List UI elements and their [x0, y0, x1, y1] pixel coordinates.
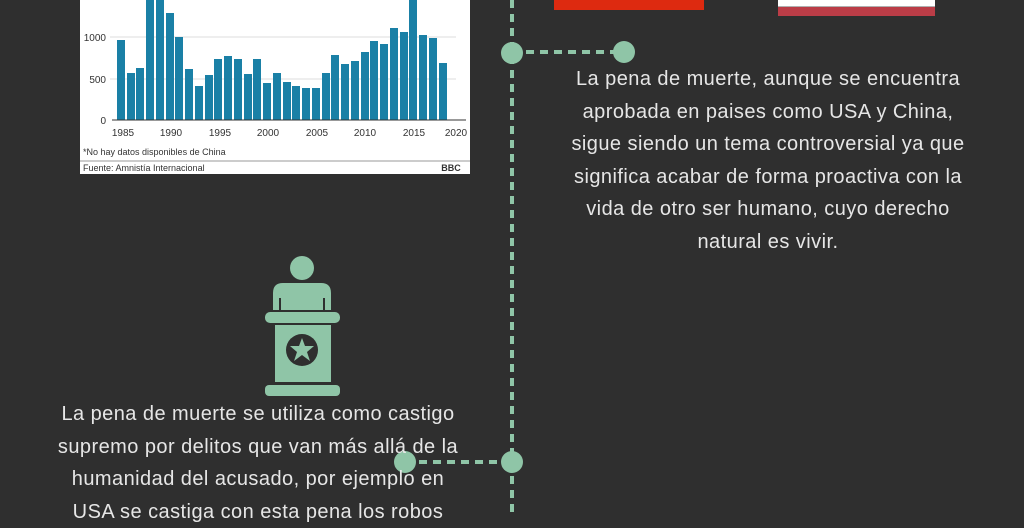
text: right paragraph: significa acabar de forma proactiva con la — [574, 166, 962, 188]
bar chart: executions: 2005 — [306, 128, 329, 139]
bar chart: executions: 2020 — [445, 128, 468, 139]
flag: red — [554, 0, 704, 10]
text: left paragraph — [58, 403, 458, 522]
bar chart: executions: 1985 — [112, 128, 135, 139]
bar chart: executions — [80, 0, 470, 174]
icon: podium — [265, 256, 340, 396]
bar chart: executions: 1995 — [209, 128, 232, 139]
text: right paragraph: La pena de muerte, aunque se encuentra — [576, 68, 960, 90]
bar chart: executions: 2000 — [257, 128, 280, 139]
bar chart: executions: 1000 — [84, 33, 106, 44]
bar chart: executions: 2015 — [403, 128, 426, 139]
text: right paragraph: natural es vivir. — [697, 230, 839, 252]
text: left paragraph: USA se castiga con esta pena los robos — [73, 500, 443, 522]
text: left paragraph: supremo por delitos que van más allá de la — [58, 436, 458, 458]
bar chart: executions: 500 — [89, 75, 106, 86]
bar chart: executions: 2010 — [354, 128, 377, 139]
text: left paragraph: La pena de muerte se utiliza como castigo — [61, 403, 455, 425]
text: right paragraph: vida de otro ser humano, cuyo derecho — [586, 198, 950, 220]
bar chart: executions: 0 — [100, 116, 106, 127]
text: right paragraph: aprobada en paises como USA y China, — [583, 100, 953, 122]
text: right paragraph: sigue siendo un tema controversial ya que — [571, 133, 965, 155]
text: left paragraph: humanidad del acusado, por ejemplo en — [72, 468, 444, 490]
bar chart: executions: Fuente: Amnistía Internacional — [83, 163, 205, 173]
bar chart: executions: BBC — [441, 163, 461, 173]
bar chart: executions: *No hay datos disponibles de China — [83, 147, 226, 157]
bar chart: executions: 1990 — [160, 128, 183, 139]
flag: white and red stripes — [778, 0, 935, 16]
text: right paragraph — [571, 68, 965, 252]
